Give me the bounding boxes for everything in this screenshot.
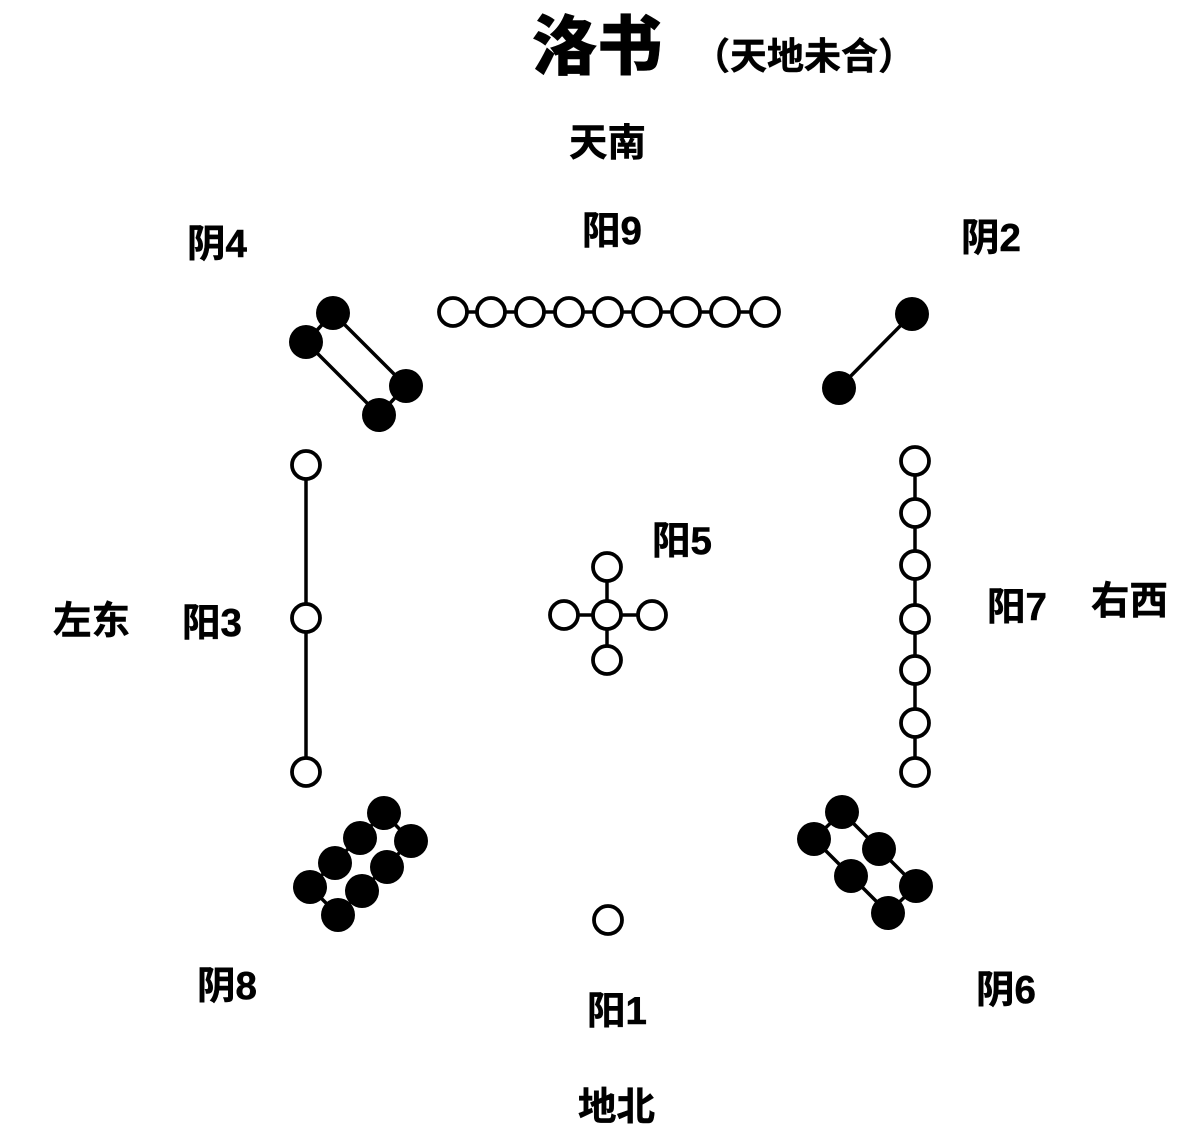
five open circles — [550, 553, 666, 674]
label: yang 1: 阳1 — [587, 990, 647, 1033]
label: yin 4: 阴4 — [187, 223, 248, 266]
label: east: 左东 — [53, 600, 130, 643]
two filled circles — [822, 297, 929, 405]
eight filled circles — [293, 796, 428, 932]
four filled circles — [289, 296, 423, 432]
label: yin 2: 阴2 — [961, 217, 1021, 260]
nine open circles — [439, 298, 779, 326]
label: south: 天南 — [569, 122, 646, 165]
three open circles — [292, 451, 320, 786]
label: yang 9: 阳9 — [582, 210, 642, 253]
label: yin 6: 阴6 — [976, 969, 1036, 1012]
one open circle — [594, 906, 622, 934]
six filled circles — [797, 795, 933, 930]
label: yang 5: 阳5 — [652, 520, 712, 563]
seven open circles — [901, 447, 929, 786]
label: north: 地北 — [578, 1086, 655, 1129]
title: 洛书 — [532, 10, 662, 83]
label: yang 7: 阳7 — [987, 586, 1047, 629]
label: west: 右西 — [1091, 580, 1168, 623]
subtitle: （天地未合） — [693, 36, 915, 77]
label: yang 3: 阳3 — [182, 602, 242, 645]
label: yin 8: 阴8 — [197, 965, 257, 1008]
